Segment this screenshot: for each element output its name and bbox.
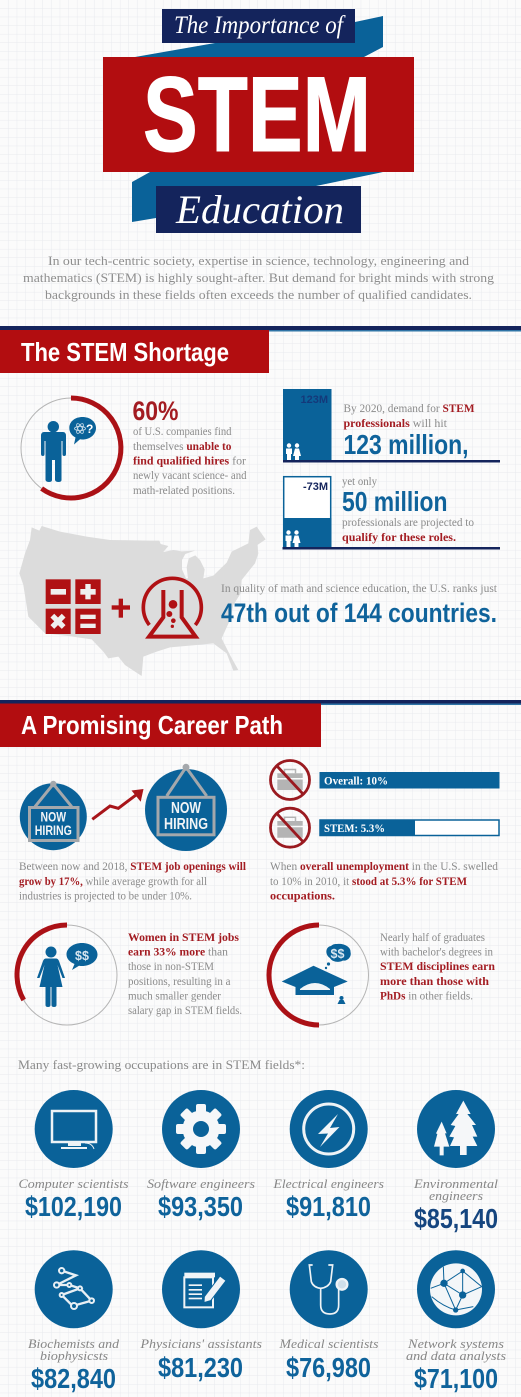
icon: lightning bolt <box>290 1090 368 1168</box>
text: professionals will hit <box>344 416 448 430</box>
stat text: math-related positions. <box>133 483 235 497</box>
text <box>19 859 247 902</box>
icon: plus <box>112 599 130 618</box>
label <box>413 1177 499 1203</box>
panel: women in STEM <box>17 925 242 1025</box>
icon: graduation cap with thought bubble <box>282 944 351 1004</box>
icon: math symbols <box>46 579 101 634</box>
label: Medical scientists <box>278 1337 379 1351</box>
icon: flask <box>143 578 201 637</box>
text: to 10% in 2010, it stood at 5.3% for STEM <box>270 874 467 888</box>
icon: graduation cap with thought bubble: $$ <box>331 947 344 961</box>
stat text: of U.S. companies find <box>133 424 232 438</box>
text: qualify for these roles. <box>342 530 456 544</box>
text: salary gap in STEM fields. <box>128 1003 242 1017</box>
occupation: computer scientists <box>18 1090 129 1222</box>
icon: no briefcase <box>270 808 310 847</box>
salary: $93,350 <box>158 1191 243 1222</box>
section divider 2 <box>0 700 521 705</box>
occupation: medical scientists <box>278 1250 379 1383</box>
label <box>406 1337 506 1363</box>
panel: job growth <box>19 764 247 902</box>
bar label: 123M <box>300 394 328 406</box>
text: Nearly half of graduates <box>380 930 485 944</box>
occupations intro: Many fast-growing occupations are in STEM fields*: <box>18 1058 305 1072</box>
icon: computer <box>35 1090 113 1168</box>
text: much smaller gender <box>128 988 221 1002</box>
icon: small now hiring sign: NOW <box>41 810 66 824</box>
text: earn 33% more than <box>128 944 228 958</box>
text: more than those with <box>380 974 489 988</box>
ribbon: upper blue <box>135 16 383 57</box>
salary: $82,840 <box>31 1363 116 1394</box>
banner: Education: Education <box>175 187 344 232</box>
figure: 50 million: 50 million <box>342 486 448 517</box>
text: yet only <box>342 474 377 488</box>
icon: large now hiring sign: NOW <box>171 800 201 817</box>
text: those in non-STEM <box>128 959 214 973</box>
text: STEM disciplines earn <box>380 959 495 973</box>
icon: small now hiring sign: HIRING <box>35 823 72 838</box>
intro text: In our tech-centric society, expertise in science, technology, engineering and <box>48 254 470 268</box>
bar: overall 10%: Overall: 10% <box>324 774 388 788</box>
bar: 50M <box>283 477 332 548</box>
ring chart 60% <box>21 398 121 498</box>
ribbon: lower blue <box>132 172 383 222</box>
baseline rule <box>282 547 500 550</box>
intro text <box>23 254 495 302</box>
stat text: 60% <box>132 396 178 426</box>
panel: 50 million bar <box>282 474 500 550</box>
heading: A Promising Career Path: A Promising Career Path <box>21 710 283 740</box>
text: with bachelor's degrees in <box>380 944 493 958</box>
text: Between now and 2018, STEM job openings will <box>19 859 247 873</box>
text: PhDs in other fields. <box>380 988 473 1002</box>
icon: small now hiring sign <box>20 781 87 850</box>
salary: $76,980 <box>286 1352 371 1383</box>
text: occupations. <box>270 888 335 902</box>
icon: large now hiring sign <box>145 764 227 851</box>
icon: molecule <box>35 1250 113 1328</box>
label: Network systems <box>407 1337 504 1351</box>
stat text <box>132 396 246 497</box>
text: industries is projected to be under 10%. <box>19 888 192 902</box>
label: Physicians' assistants <box>139 1337 262 1351</box>
panel: math plus science <box>46 578 498 637</box>
icon: notepad and pencil <box>162 1250 240 1328</box>
occupation: environmental engineers <box>413 1090 499 1234</box>
ring chart 33% <box>17 925 117 1025</box>
text <box>344 401 474 430</box>
label: Computer scientists <box>18 1177 129 1191</box>
bar label: -73M <box>303 481 328 493</box>
header logo <box>103 9 414 233</box>
heading: A Promising Career Path <box>0 704 321 747</box>
occupation: network systems <box>406 1250 506 1394</box>
occupation: software engineers <box>147 1090 255 1222</box>
intro text: mathematics (STEM) is highly sought-after. But demand for bright minds with strong <box>23 271 495 285</box>
map: United States <box>19 526 266 676</box>
text: grow by 17%, while average growth for all <box>19 874 208 888</box>
salary: $71,100 <box>414 1363 498 1394</box>
text <box>270 859 498 902</box>
label: and data analysts <box>406 1349 506 1363</box>
icon: stethoscope <box>290 1250 368 1328</box>
rank text: In quality of math and science education, the U.S. ranks just <box>221 581 498 595</box>
text: Women in STEM jobs <box>128 930 239 944</box>
label: Environmental <box>413 1177 499 1191</box>
occupation: electrical engineers <box>272 1090 384 1222</box>
occupation: physicians' assistants <box>139 1250 262 1383</box>
icon: person with atom speech bubble <box>41 417 96 482</box>
intro text: backgrounds in these fields often exceeds the number of qualified candidates. <box>45 288 472 302</box>
figure: 123 million: 123 million, <box>344 429 468 460</box>
text: professionals are projected to <box>342 515 474 529</box>
occupation: biochemists <box>28 1250 120 1394</box>
salary: $81,230 <box>158 1352 243 1383</box>
icon: person with atom speech bubble: ? <box>86 422 93 436</box>
salary: $85,140 <box>414 1203 498 1234</box>
ring chart 50% <box>268 925 368 1025</box>
label: Electrical engineers <box>272 1177 384 1191</box>
icon: two people <box>286 530 300 547</box>
label: biophysicsts <box>40 1349 108 1363</box>
text <box>128 930 242 1017</box>
text: positions, resulting in a <box>128 974 231 988</box>
text <box>342 474 474 544</box>
heading: The STEM Shortage: The STEM Shortage <box>21 337 229 367</box>
salary: $102,190 <box>25 1191 122 1222</box>
panel: 60% of companies <box>21 396 246 498</box>
stat text: find qualified hires for <box>133 454 246 468</box>
section divider 1 <box>0 326 521 332</box>
text: By 2020, demand for STEM <box>344 401 474 415</box>
panel: graduates <box>268 925 495 1025</box>
label: Software engineers <box>147 1177 255 1191</box>
icon: trees <box>417 1090 495 1168</box>
bar: STEM 5.3%: STEM: 5.3% <box>324 821 385 835</box>
icon: woman with dollar bubble <box>37 943 98 1007</box>
stat text: newly vacant science- and <box>133 468 246 482</box>
label: Biochemists and <box>28 1337 120 1351</box>
icon: two people <box>286 443 301 460</box>
baseline rule <box>283 460 500 462</box>
bar: overall 10% <box>320 772 500 788</box>
bar: 123M <box>283 389 332 462</box>
banner: STEM: STEM <box>143 54 371 174</box>
icon: no briefcase <box>270 760 310 800</box>
icon: network globe <box>417 1250 495 1328</box>
icon: woman with dollar bubble: $$ <box>75 949 89 963</box>
stat text: themselves unable to <box>133 439 232 453</box>
salary: $91,810 <box>286 1191 371 1222</box>
icon: large now hiring sign: HIRING <box>164 816 208 833</box>
text: When overall unemployment in the U.S. swelled <box>270 859 498 873</box>
text <box>380 930 495 1002</box>
arrow: growth <box>92 789 144 819</box>
icon: gear <box>162 1090 240 1168</box>
heading: The STEM Shortage <box>0 330 269 373</box>
label <box>28 1337 120 1363</box>
banner: The Importance of: The Importance of <box>174 12 346 39</box>
bar: STEM 5.3% <box>320 820 499 836</box>
panel: 123 million bar <box>283 389 500 462</box>
panel: unemployment <box>270 760 500 902</box>
label: engineers <box>429 1189 483 1203</box>
